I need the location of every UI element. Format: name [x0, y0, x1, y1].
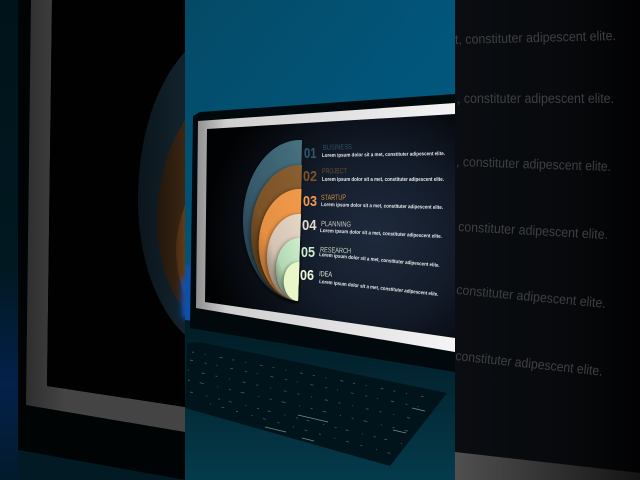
list row 06	[300, 270, 438, 296]
list row 06: 06	[300, 267, 314, 284]
enlarged text lines: constituter adipescent elite.	[458, 219, 608, 242]
layer 3	[259, 189, 302, 301]
list row 04	[302, 220, 442, 238]
list row 01	[304, 144, 445, 158]
list row 03	[304, 194, 443, 210]
list row 02: 02	[303, 168, 317, 185]
panel: left blurred backdrop	[0, 0, 190, 480]
white screen frame	[196, 103, 455, 352]
list row 06: Lorem ipsum dolor sit a met, constituter adipescent elite.	[319, 279, 439, 298]
layer 1	[243, 140, 302, 301]
keyboard	[185, 342, 447, 466]
list row 06: IDEA	[319, 269, 332, 279]
enlarged text lines: constituter adipescent elite.	[456, 282, 606, 311]
enlarged text lines: t, constituter adipescent elite.	[455, 28, 616, 47]
presentation screen	[205, 114, 455, 338]
list row 03: Lorem ipsum dolor sit a met, constituter adipescent elite.	[321, 202, 444, 211]
blurred screen frame	[26, 0, 185, 432]
list row 05: 05	[301, 244, 315, 261]
list row 05	[302, 246, 440, 267]
list row 04: 04	[302, 217, 317, 234]
list row 01: 01	[304, 145, 316, 162]
list row 04: PLANNING	[321, 219, 351, 229]
enlarged text lines: , constituter adipescent elite.	[456, 154, 611, 174]
blurred frame bottom edge	[455, 452, 640, 480]
panel: right blurred backdrop	[455, 0, 640, 480]
list row 02: Lorem ipsum dolor sit a met, constituter adipescent elite.	[322, 177, 444, 183]
list row 02: PROJECT	[322, 166, 347, 175]
blurred semicircle layers	[138, 52, 185, 335]
panel: center laptop photo	[185, 0, 455, 480]
enlarged text lines: , constituter adipescent elite.	[457, 91, 614, 106]
layer 5	[276, 238, 300, 301]
list row 04: Lorem ipsum dolor sit a met, constituter adipescent elite.	[320, 228, 443, 240]
list row 01: Lorem ipsum dolor sit a met, constituter adipescent elite.	[322, 151, 445, 159]
chart: nested semicircles	[243, 140, 302, 301]
enlarged text lines: constituter adipescent elite.	[455, 348, 603, 379]
blue glow at laptop edge	[185, 262, 191, 320]
list row 05: Lorem ipsum dolor sit a met, constituter adipescent elite.	[319, 252, 440, 269]
laptop bezel	[190, 94, 455, 372]
layer 6	[284, 262, 300, 301]
list row 01: BUSINESS	[323, 142, 352, 152]
enlarged text lines	[455, 28, 616, 379]
list row 03: STARTUP	[321, 193, 346, 202]
list row 05: RESEARCH	[320, 245, 351, 255]
list row 02	[304, 168, 444, 182]
layer 4	[267, 214, 301, 301]
list row 03: 03	[303, 193, 317, 210]
layer 2	[251, 165, 302, 301]
